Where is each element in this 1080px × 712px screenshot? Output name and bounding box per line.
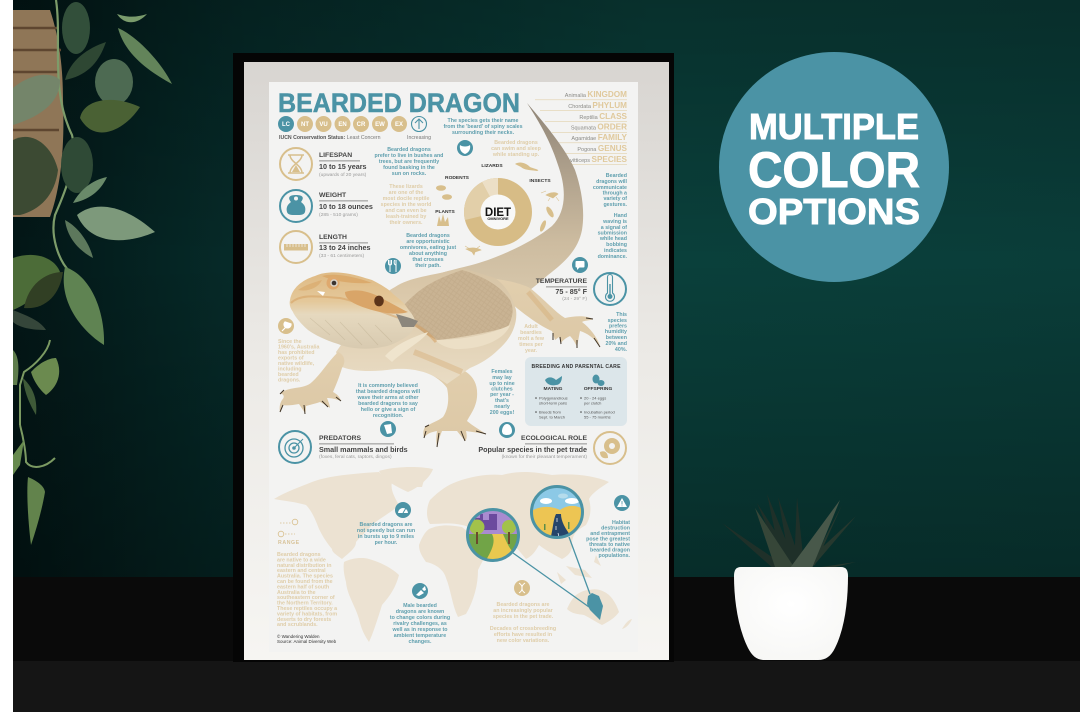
conservation status badges: LC: [282, 122, 291, 128]
badge: multiple color options: [719, 52, 949, 282]
stat: ecological role: (known for their pleasant temperament): [502, 454, 587, 460]
stat: length: LENGTH: [319, 234, 347, 241]
text: clutches: per year -: [490, 392, 514, 398]
stat: weight: [280, 190, 373, 222]
text: docile: These lizards: [389, 184, 423, 190]
text: swim: while standing up.: [492, 152, 540, 158]
text: pet trade: efforts have resulted in: [494, 632, 552, 638]
text: hand waving: bobbing: [606, 242, 627, 248]
text: color change: well as in response to: [391, 627, 448, 633]
conservation status text: Increasing: [407, 135, 431, 141]
stat: weight: WEIGHT: [319, 192, 347, 199]
stat: predators: PREDATORS: [319, 435, 362, 442]
text: hand waving: waving is: [602, 219, 627, 225]
text: hand waving: Hand: [614, 213, 627, 219]
succulent leaves: [722, 494, 856, 573]
text: hand waving: dominance.: [598, 254, 628, 260]
stat: length: [280, 231, 371, 263]
text: docile: species in the world: [381, 202, 431, 208]
text: threats: destruction: [601, 526, 630, 532]
taxonomy list: Chordata PHYLUM: [568, 101, 627, 110]
text: humidity: humidity: [605, 329, 627, 335]
badge: multiple color options: COLOR: [748, 142, 920, 198]
text: range description: These reptiles occupy a: [277, 606, 337, 612]
text: color change: to change colors during: [390, 615, 450, 621]
text: range description: Australia to the: [277, 590, 316, 596]
stat: temperature: 75 - 85° F: [555, 287, 588, 296]
diet donut chart: DIET: [485, 207, 511, 219]
taxonomy list: Agamidae FAMILY: [571, 133, 628, 142]
icon: DNA: [514, 580, 530, 596]
text: omnivores: about anything: [409, 251, 447, 257]
diet labels and animal icons: [435, 163, 559, 255]
text: molt: Adult: [524, 324, 538, 330]
text: export ban: native wildlife,: [278, 361, 315, 367]
stat: predators: (foxes, feral cats, raptors, dingos): [319, 454, 392, 460]
text: arm waving: wave their arms at other: [357, 395, 418, 401]
white left margin: [0, 0, 13, 712]
text: hand waving: a signal of: [601, 225, 627, 231]
icon: warning: [614, 495, 630, 511]
text: docile: most docile reptile: [383, 196, 429, 202]
badge: multiple color options: MULTIPLE: [749, 106, 919, 147]
text: humidity: species: [608, 318, 627, 324]
text: range description: Australia. The species: [277, 574, 333, 580]
panel: breeding and parental care: Sept. to March: [539, 414, 565, 420]
text: threats: populations.: [599, 553, 631, 559]
text: range description: southeastern corner of: [277, 595, 335, 601]
text: clutches: Females: [491, 369, 513, 375]
text: omnivores: their path.: [415, 263, 441, 269]
stat: weight: (285 - 510 grams): [319, 212, 358, 218]
stat: predators: [279, 431, 408, 463]
text: habitat: trees, but are frequently: [379, 159, 439, 165]
scene: woodland circle: [469, 511, 517, 559]
text: humidity: between: [606, 335, 627, 341]
text: humidity: This: [616, 312, 627, 318]
panel: breeding and parental care: [525, 357, 627, 426]
text: export ban: exports of: [278, 356, 304, 362]
panel: breeding and parental care: Incubation period: [584, 410, 615, 414]
text: color change: Male bearded: [403, 603, 437, 609]
text: docile: leash-trained by: [386, 214, 426, 220]
badge: multiple color options: OPTIONS: [748, 191, 920, 232]
conservation status badges: EW: [375, 122, 385, 128]
text: range description: deserts to dry forests: [277, 617, 331, 623]
pointer lines: [513, 537, 590, 607]
text: beard name: The species gets their name: [448, 118, 519, 124]
text: pet trade: Bearded dragons are: [496, 602, 550, 608]
text: omnivores: that crosses: [412, 257, 444, 263]
taxonomy list: Pogona GENUS: [577, 144, 628, 153]
panel: breeding and parental care: MATING: [544, 386, 563, 392]
text: arm waving: recognition.: [373, 413, 404, 419]
text: clutches: 200 eggs!: [490, 410, 514, 416]
taxonomy list: Squamata ORDER: [571, 122, 627, 132]
text: gestures: Bearded: [606, 173, 627, 179]
text: range description: Bearded dragons: [277, 552, 321, 558]
text: color change: changes.: [409, 639, 432, 645]
text: arm waving: that bearded dragons will: [356, 389, 421, 395]
text: speed: Bearded dragons are: [360, 522, 413, 528]
text: hand waving: indicates: [604, 248, 627, 254]
text: export ban: 1960's, Australia: [278, 344, 319, 350]
text: export ban: dragons.: [278, 378, 301, 384]
text: molt: times per: [519, 342, 543, 348]
text: export ban: Since the: [278, 339, 302, 345]
text: range description: are native to a wide: [277, 558, 326, 564]
text: threats: pose the greatest: [586, 536, 630, 542]
text: gestures: communicate: [593, 185, 627, 191]
text: habitat: Bearded dragons: [387, 147, 431, 153]
lizard photo: [280, 103, 600, 447]
text: export ban: bearded: [278, 372, 299, 378]
title: BEARDED DRAGON: [278, 88, 520, 118]
text: gestures: variety of: [603, 196, 627, 202]
text: arm waving: bearded dragons to say: [358, 401, 418, 407]
text: swim: Bearded dragons: [494, 140, 538, 146]
text: humidity: prefers: [609, 324, 627, 330]
text: molt: beardies: [520, 330, 542, 336]
conservation status badges: VU: [319, 122, 328, 128]
stat: lifespan: LIFESPAN: [319, 152, 352, 159]
hanging plant: [13, 0, 172, 545]
scene: desert road circle: [533, 488, 581, 536]
taxonomy list: Reptilia CLASS: [579, 112, 628, 121]
conservation status text: [279, 135, 431, 141]
text: habitat: found basking in the: [383, 165, 435, 171]
text: omnivores: are opportunistic: [406, 239, 450, 245]
text: export ban: has prohibited: [278, 350, 314, 356]
panel: breeding and parental care: short-term pairs: [539, 400, 567, 406]
text: arm waving: It is commonly believed: [358, 383, 418, 389]
panel: breeding and parental care: Polygynandrous: [539, 396, 568, 400]
taxonomy list: [535, 90, 628, 165]
conservation status badges: NT: [301, 122, 309, 128]
text: color change: rivalry challenges, as: [393, 621, 447, 627]
conservation status badges: EN: [338, 122, 347, 128]
panel: breeding and parental care: 55 - 75 months: [584, 414, 611, 420]
text: arm waving: hello or give a sign of: [361, 407, 415, 413]
text: habitat: sun on rocks.: [392, 171, 427, 177]
text: color change: dragons are known: [396, 609, 444, 615]
text: threats: and entrapment: [590, 531, 630, 537]
icon: map pins range: [278, 519, 298, 537]
text: range description: and scrublands.: [277, 622, 318, 628]
text: humidity: 20% and: [606, 341, 627, 347]
text: color change: ambient temperature: [394, 633, 446, 639]
text: molt: year.: [525, 348, 538, 354]
text: pet trade: new color variations.: [497, 638, 550, 644]
text: clutches: clutches: [491, 386, 513, 392]
mat board: [244, 62, 669, 660]
icon: color brush: [412, 583, 428, 599]
text: range description: eastern and central: [277, 568, 326, 574]
diet labels and animal icons: LIZARDS: [481, 163, 503, 169]
text: speed: in bursts up to 9 miles: [358, 534, 414, 540]
panel: breeding and parental care: per clutch: [584, 400, 601, 406]
icon: beard: [457, 140, 473, 156]
text: range description: the Northern Territory.: [277, 601, 333, 607]
stat: lifespan: [280, 148, 367, 180]
stat: temperature: TEMPERATURE: [536, 278, 587, 285]
conservation status badges: [278, 116, 407, 132]
icon: utensils: [385, 258, 401, 274]
text: pet trade: Decades of crossbreeding: [490, 626, 556, 632]
text: pet trade: species in the pet trade.: [493, 614, 554, 620]
text: beard name: surrounding their necks.: [452, 130, 515, 136]
scene: desert road circle ring: [532, 486, 582, 538]
stat: lifespan: 10 to 15 years: [319, 162, 367, 171]
icon: waving hand: [380, 421, 396, 437]
icon: Australia export: [278, 318, 294, 334]
text: threats: threats to native: [589, 542, 630, 548]
text: clutches: nearly: [494, 404, 510, 410]
text: clutches: may lay: [492, 375, 512, 381]
panel: breeding and parental care: OFFSPRING: [584, 386, 612, 392]
text: threats: bearded dragon: [590, 548, 630, 554]
text: swim: can swim and sleep: [491, 146, 542, 152]
credits: © Wandering Walden: [277, 633, 320, 639]
icon: increasing arrow: [412, 116, 426, 132]
stat: predators: Small mammals and birds: [319, 445, 408, 454]
diet donut chart: [464, 178, 532, 246]
map: range highlight: [587, 593, 603, 620]
text: omnivores: Bearded dragons: [406, 233, 450, 239]
stat: lifespan: (upwards of 20 years): [319, 172, 367, 178]
conservation status text: IUCN Conservation Status: Least Concern: [279, 135, 381, 141]
stat: temperature: (24 - 29° F): [562, 296, 587, 302]
taxonomy list: Animalia KINGDOM: [565, 90, 627, 99]
icon: speedometer: [395, 502, 411, 518]
text: humidity: 40%.: [615, 347, 628, 353]
text: threats: Habitat: [612, 520, 630, 526]
text: range description: can be found from the: [277, 579, 333, 585]
shelf: [13, 577, 1080, 712]
text: export ban: including: [278, 366, 302, 372]
text: range description: natural distribution in: [277, 563, 331, 569]
icon: egg: [499, 422, 515, 438]
text: clutches: that's: [495, 398, 509, 404]
text: hand waving: while head: [599, 236, 627, 242]
poster: [269, 82, 638, 652]
range label: RANGE: [278, 540, 300, 546]
taxonomy list: vitticeps SPECIES: [570, 155, 628, 164]
text: range description: eastern half of south: [277, 584, 329, 590]
panel: breeding and parental care: 20 - 24 eggs: [584, 396, 606, 400]
text: speed: not speedy but can run: [357, 528, 415, 534]
diet labels and animal icons: RODENTS: [445, 175, 470, 181]
diet labels and animal icons: PLANTS: [435, 209, 456, 215]
stat: weight: 10 to 18 ounces: [319, 202, 373, 211]
text: speed: per hour.: [375, 540, 398, 546]
stat: length: (33 - 61 centimeters): [319, 253, 364, 259]
text: docile: and can even be: [385, 208, 427, 214]
text: gestures: dragons will: [596, 179, 628, 185]
text: docile: their owners.: [390, 220, 423, 226]
text: clutches: up to nine: [489, 381, 515, 387]
stat: temperature: [536, 273, 626, 305]
conservation status badges: EX: [395, 122, 403, 128]
stat: ecological role: ECOLOGICAL ROLE: [521, 435, 587, 442]
text: habitat: prefer to live in bushes and: [375, 153, 443, 159]
world map: [274, 467, 632, 642]
scene: woodland circle ring: [468, 510, 518, 560]
text: molt: molt a few: [518, 336, 545, 342]
stat: ecological role: Popular species in the pet trade: [478, 445, 587, 454]
panel: breeding and parental care: Breeds from: [539, 410, 561, 414]
stat: length: 13 to 24 inches: [319, 243, 371, 252]
icon: speech bubble: [572, 257, 588, 273]
credits: Source: Animal Diversity Web: [277, 639, 337, 644]
text: gestures: through a: [603, 190, 627, 196]
conservation status badges: CR: [357, 122, 366, 128]
text: hand waving: submission: [598, 230, 627, 236]
white pot: [734, 567, 848, 660]
diet labels and animal icons: INSECTS: [529, 178, 551, 184]
text: omnivores: omnivores, eating just: [400, 245, 456, 251]
diet donut chart: OMNIVORE: [487, 216, 509, 221]
text: docile: are one of the: [389, 190, 423, 196]
stat: ecological role: [478, 432, 626, 464]
text: pet trade: an increasingly popular: [493, 608, 553, 614]
panel: breeding and parental care: BREEDING AND PARENTAL CARE: [532, 364, 621, 370]
text: gestures: gestures.: [603, 202, 628, 208]
text: range description: variety of habitats, from: [277, 611, 337, 617]
picture frame: [233, 53, 674, 662]
text: beard name: from the 'beard' of spiny scales: [443, 124, 523, 130]
